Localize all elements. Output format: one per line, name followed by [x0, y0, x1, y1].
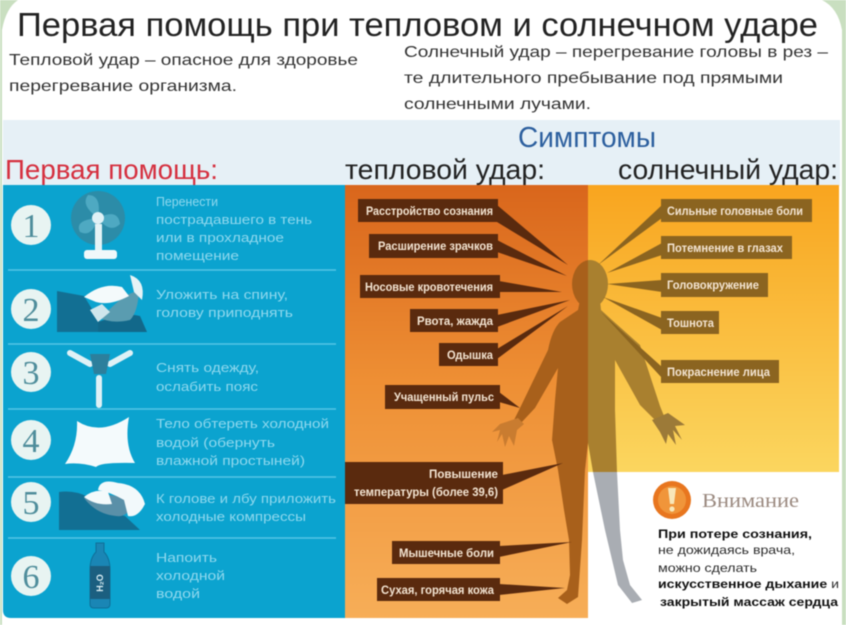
label: high temperature: Повышение: [429, 467, 498, 481]
label: severe headache: [598, 199, 812, 265]
panel: heat stroke background: [345, 185, 588, 618]
step 5: 5: [22, 485, 40, 522]
label: nosebleeds: [360, 275, 562, 298]
step 3: 3: [22, 355, 40, 392]
label: rapid pulse: Учащенный пульс: [394, 390, 494, 404]
step 4: водой (обернуть: [156, 436, 275, 450]
step 4: 4: [22, 423, 40, 460]
label: nosebleeds: Носовые кровотечения: [365, 280, 493, 294]
label: facial redness: [601, 312, 779, 383]
definition: sunstroke: те длительного пребывание под прямыми: [404, 70, 783, 87]
panel: first aid steps: [3, 185, 345, 618]
step 6: холодной: [156, 569, 225, 583]
title: Первая помощь при тепловом и солнечном ударе: [17, 6, 818, 43]
step 3: ослабить пояс: [156, 380, 258, 394]
label: nausea: Тошнота: [667, 316, 714, 330]
attention text: не дожидаясь врача,: [658, 543, 795, 557]
attention text: закрытый массаж сердца: [660, 595, 838, 609]
label: shortness of breath: Одышка: [447, 348, 493, 362]
step 6: [11, 543, 225, 608]
step 6: Напоить: [156, 551, 217, 565]
label: shortness of breath: [439, 306, 568, 366]
label: dizziness: [607, 273, 768, 297]
step 4: влажной простыней): [156, 454, 305, 468]
label: facial redness: Покраснение лица: [667, 365, 770, 379]
heading: heat stroke: тепловой удар:: [345, 154, 545, 185]
attention text: [658, 527, 839, 609]
label: muscle pain: [392, 541, 572, 564]
label: vomiting, thirst: Рвота, жажда: [417, 314, 493, 328]
step 6: водой: [156, 587, 200, 601]
step 1: Перенести: [156, 195, 218, 209]
label: dilated pupils: [369, 234, 567, 276]
panel: sunstroke background: [588, 185, 839, 472]
heat stroke symptoms: [345, 199, 572, 601]
label: confusion: Расстройство сознания: [366, 204, 493, 218]
step 1: помещение: [156, 249, 239, 263]
label: rapid pulse: [385, 385, 520, 409]
label: nausea: [603, 297, 719, 334]
step 2: 2: [22, 292, 40, 329]
step 1: 1: [22, 208, 40, 245]
label: vomiting, thirst: [410, 300, 570, 332]
step 1: [11, 191, 312, 263]
step 1: или в прохладное: [156, 231, 284, 245]
definition: heat stroke: Тепловой удар – опасное для здоровье: [9, 52, 358, 69]
step 6: 6: [22, 559, 40, 596]
header band: [3, 120, 840, 186]
step 5: К голове и лбу приложить: [156, 492, 336, 506]
step 2: Уложить на спину,: [156, 288, 288, 302]
step 1: пострадавшего в тень: [156, 213, 312, 227]
label: severe headache: Сильные головные боли: [667, 204, 803, 218]
heading: first aid: Первая помощь:: [5, 154, 218, 185]
sunstroke symptoms: [598, 199, 812, 383]
step 5: холодные компрессы: [156, 510, 306, 524]
attention heading: Внимание: [702, 490, 799, 512]
label: darkening of vision: Потемнение в глазах: [667, 241, 783, 255]
heading: sunstroke: солнечный удар:: [618, 154, 838, 185]
label: darkening of vision: [607, 236, 792, 273]
label: dizziness: Головокружение: [667, 278, 759, 292]
definition: sunstroke: солнечными лучами.: [404, 96, 591, 113]
step 2: [11, 275, 293, 332]
step 2: голову приподнять: [156, 306, 293, 320]
label: high temperature: температуры (более 39,6): [354, 485, 498, 499]
step 3: [11, 352, 259, 405]
label: dry hot skin: Сухая, горячая кожа: [381, 583, 494, 597]
label: confusion: [358, 199, 568, 265]
definition: heat stroke: перегревание организма.: [9, 78, 237, 95]
step 6: H₂O: [95, 574, 105, 592]
definition: sunstroke: [404, 44, 828, 113]
step 3: Снять одежду,: [156, 361, 259, 375]
label: muscle pain: Мышечные боли: [399, 546, 494, 560]
body silhouette: [492, 260, 685, 604]
attention text: При потере сознания,: [658, 527, 812, 541]
attention text: искусственное дыхание и: [658, 577, 839, 591]
step 5: [11, 482, 336, 530]
step 4: Тело обтереть холодной: [156, 417, 329, 431]
label: dilated pupils: Расширение зрачков: [378, 239, 493, 253]
attention text: можно сделать: [658, 561, 757, 575]
label: dry hot skin: [377, 578, 565, 601]
definition: sunstroke: Солнечный удар – перегревание головы в рез –: [404, 44, 828, 61]
heading: symptoms: Симптомы: [518, 122, 656, 154]
step 4: [11, 417, 329, 468]
definition: heat stroke: [9, 52, 358, 95]
icon: warning: [653, 481, 691, 519]
label: high temperature: [345, 462, 563, 504]
